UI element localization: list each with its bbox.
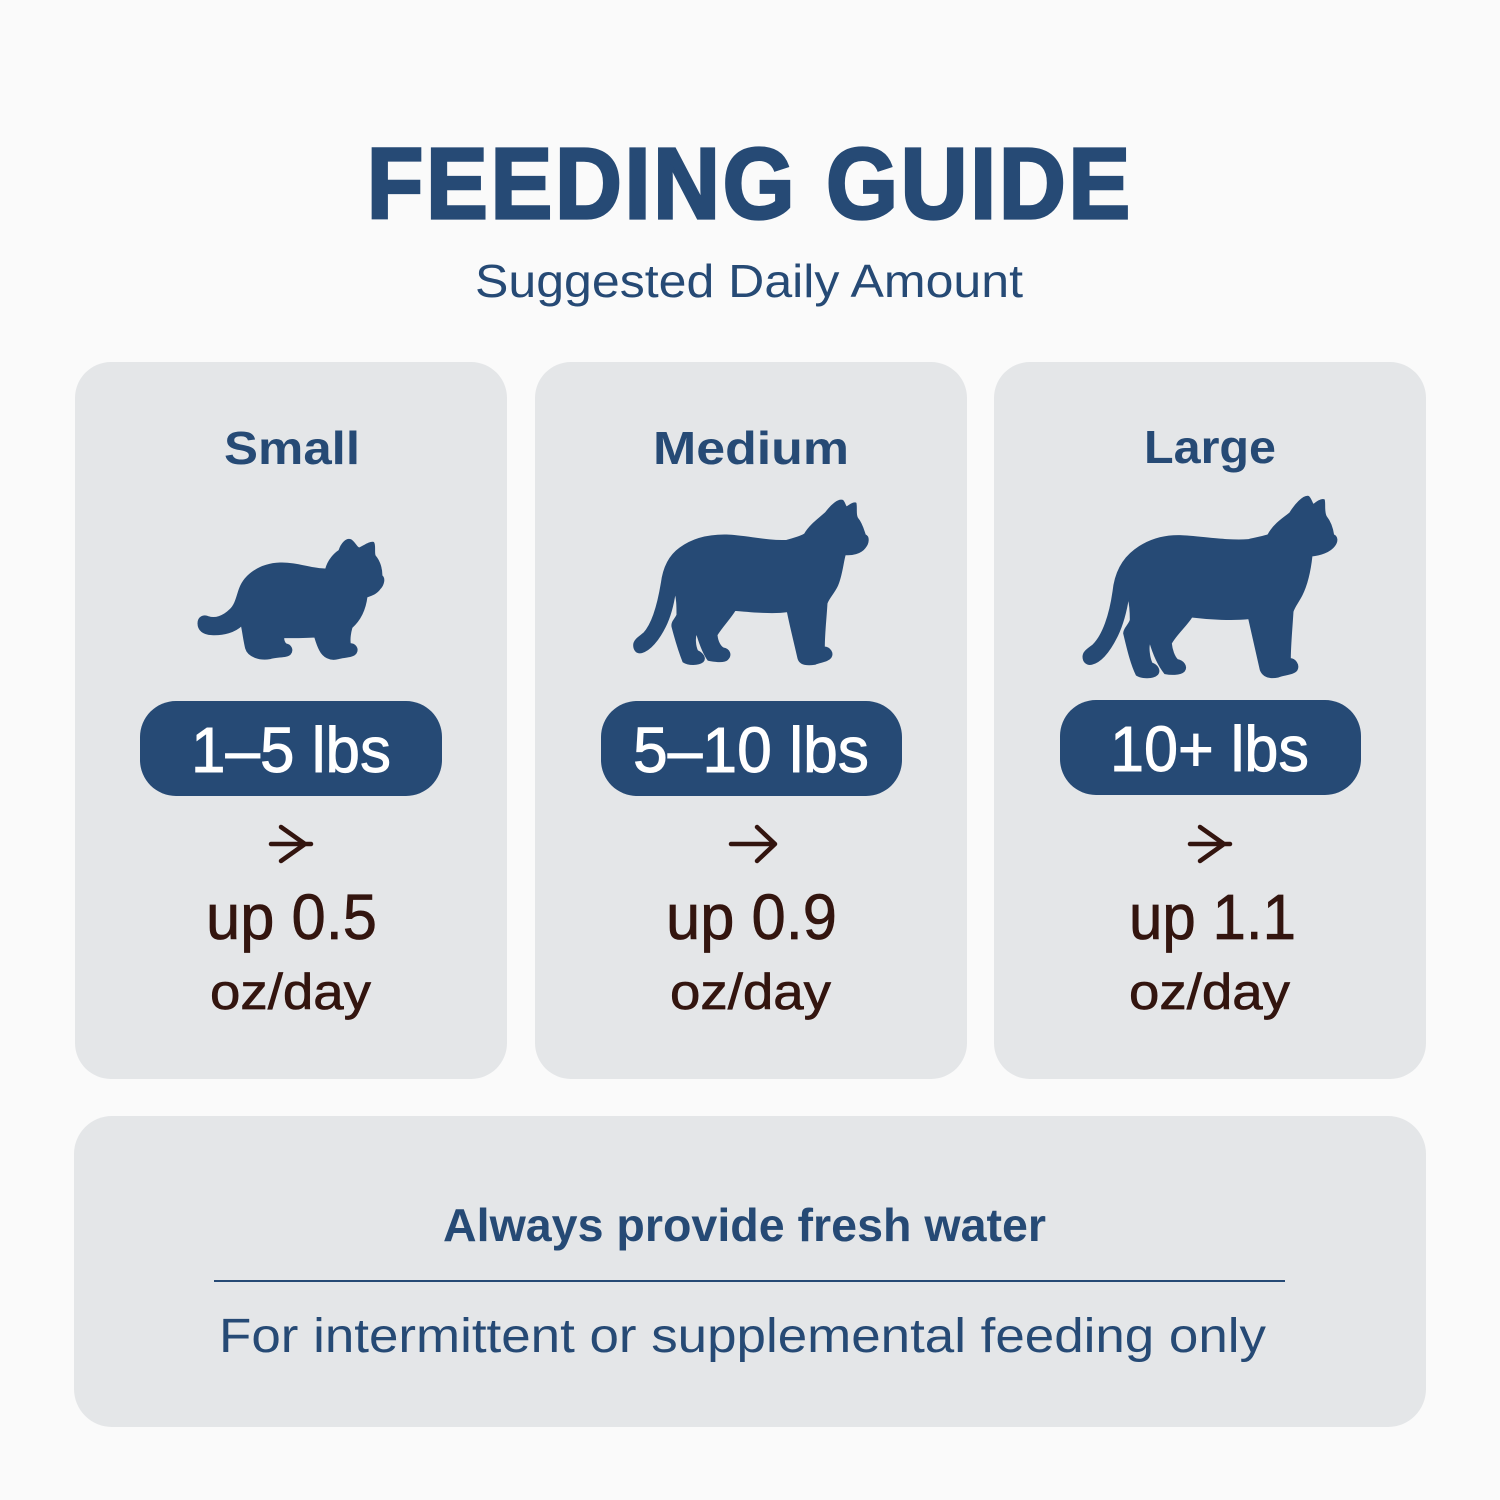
weight pill: 10+ lbs bbox=[1060, 700, 1361, 795]
panel: feeding notes bbox=[74, 1116, 1426, 1427]
note: fresh water: Always provide fresh water bbox=[443, 1199, 1046, 1251]
arrow bbox=[1190, 827, 1230, 861]
weight pill: 1–5 lbs: 1–5 lbs bbox=[191, 714, 391, 786]
weight pill: 5–10 lbs: 5–10 lbs bbox=[633, 714, 869, 786]
weight pill: 5–10 lbs bbox=[601, 701, 902, 796]
panel: small cat bbox=[75, 362, 507, 1079]
arrow bbox=[731, 827, 775, 861]
panel: large cat bbox=[994, 362, 1426, 1079]
icon: large cat bbox=[1083, 497, 1337, 677]
note: feeding use: For intermittent or supplemental feeding only bbox=[219, 1310, 1266, 1363]
amount: up 0.9: up 0.9 bbox=[666, 881, 837, 953]
amount: up 1.1: up 1.1 bbox=[1129, 881, 1296, 953]
icon: small cat bbox=[198, 540, 383, 659]
weight pill: 1–5 lbs bbox=[140, 701, 442, 796]
heading: Medium: Medium bbox=[653, 422, 849, 474]
amount: up 0.5: up 0.5 bbox=[206, 881, 377, 953]
panel: medium cat bbox=[535, 362, 967, 1079]
arrow bbox=[271, 827, 311, 861]
icon: medium cat bbox=[634, 500, 868, 664]
unit: oz/day: oz/day bbox=[670, 964, 831, 1020]
weight pill: 10+ lbs: 10+ lbs bbox=[1110, 713, 1309, 785]
title: FEEDING GUIDE bbox=[367, 128, 1130, 240]
unit: oz/day: oz/day bbox=[1129, 964, 1290, 1020]
heading: Large: Large bbox=[1144, 421, 1276, 473]
subtitle: Suggested Daily Amount bbox=[475, 255, 1023, 307]
unit: oz/day: oz/day bbox=[210, 964, 371, 1020]
heading: Small: Small bbox=[224, 422, 360, 474]
